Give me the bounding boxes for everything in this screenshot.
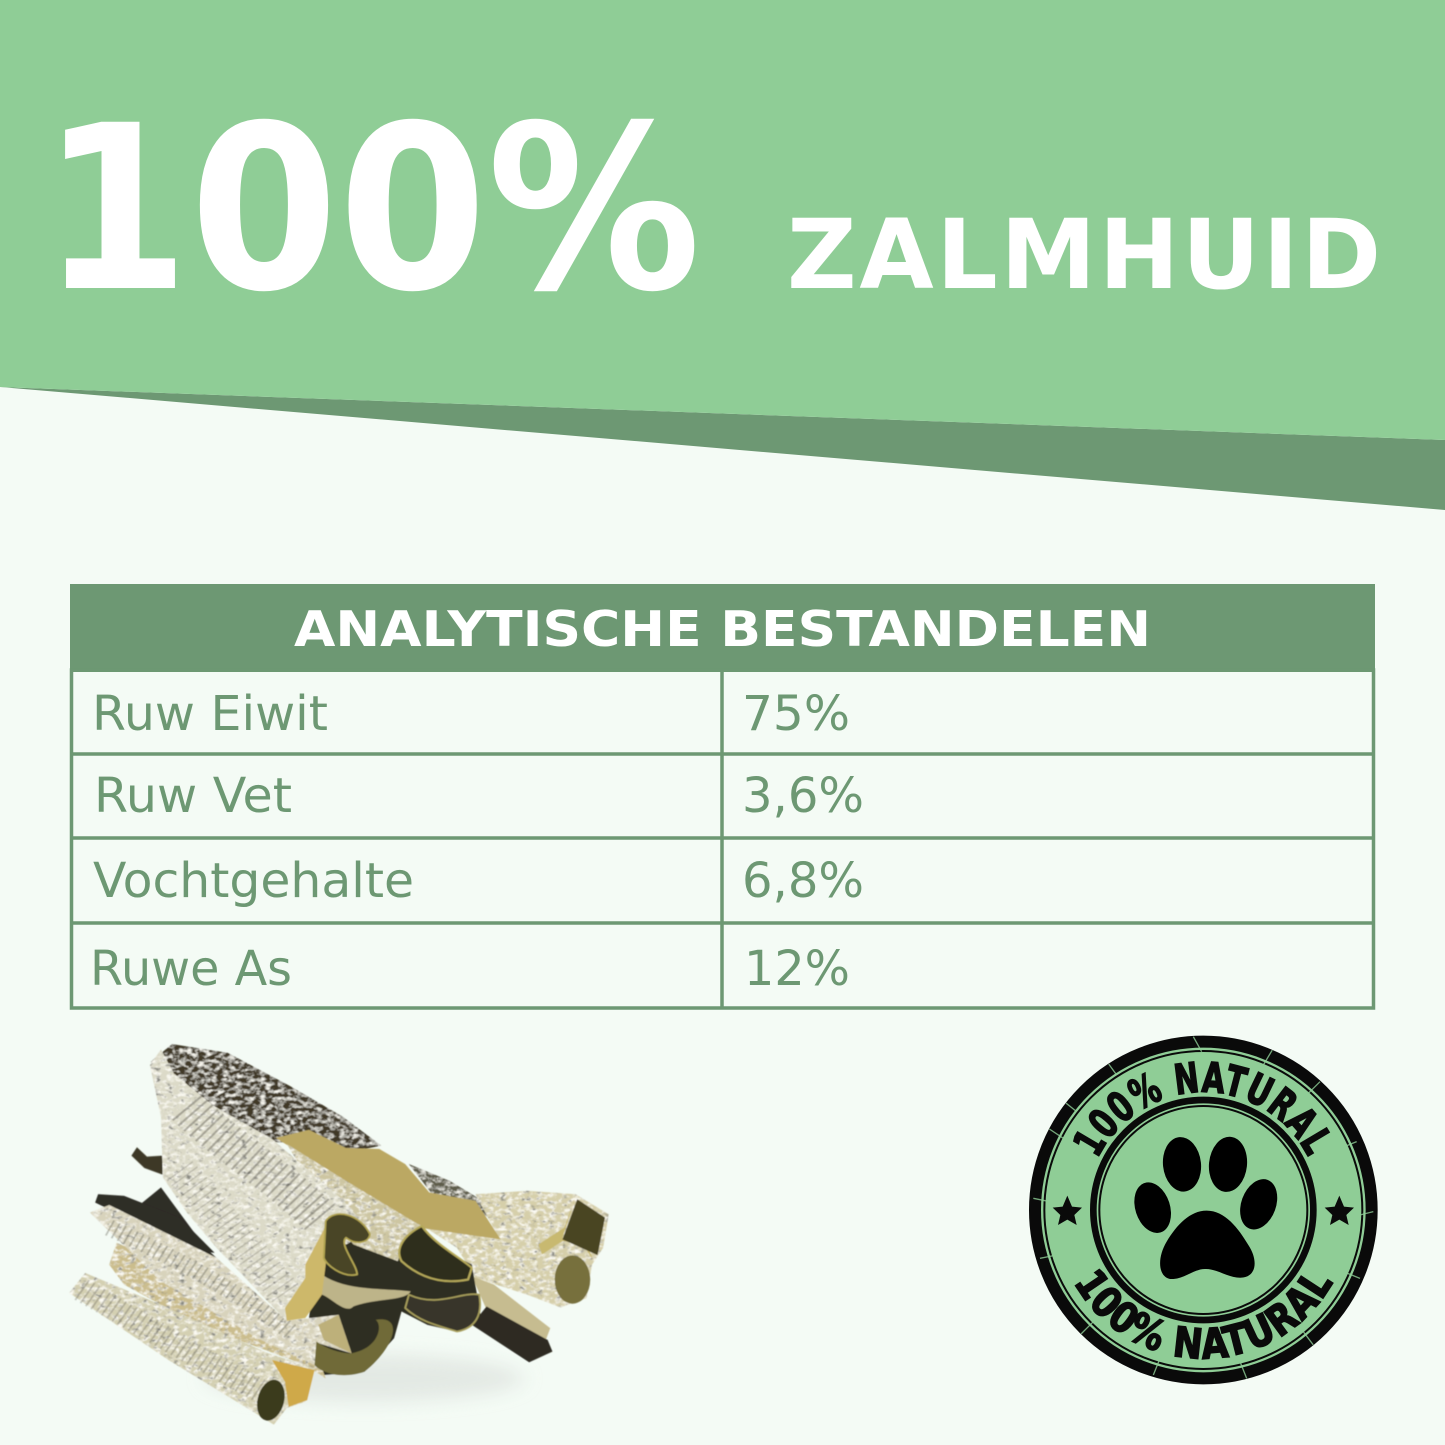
right roll yellow lip <box>538 1198 594 1261</box>
curl piece centre <box>322 1275 411 1309</box>
title: 100%: 100% <box>41 76 701 342</box>
dark middle cluster <box>309 1231 481 1375</box>
value: vochtgehalte: 6,8% <box>742 853 864 909</box>
stamp disc <box>1029 1036 1377 1384</box>
row: ruw eiwit: Ruw Eiwit <box>92 686 328 742</box>
paw toe 1 <box>1128 1178 1177 1238</box>
stamp thin inner ring <box>1099 1106 1307 1314</box>
main roll grey hatching <box>187 1107 320 1218</box>
main roll dark curl <box>324 1214 370 1275</box>
small dark scrap <box>131 1147 163 1175</box>
main roll lower hatching <box>180 1171 287 1295</box>
tan stick <box>472 1276 550 1340</box>
paw pad <box>1160 1211 1255 1279</box>
badge: 100% natural stamp <box>1029 1036 1378 1384</box>
title: zalmhuid: ZALMHUID <box>787 199 1381 311</box>
black stick lower right <box>472 1306 552 1362</box>
front roll hatching <box>81 1290 268 1395</box>
star right <box>1325 1196 1354 1225</box>
table rows <box>90 686 864 997</box>
curl piece right <box>405 1294 480 1332</box>
table heading: ANALYTISCHE BESTANDELEN <box>294 601 1151 658</box>
stamp inner ring <box>1093 1100 1313 1320</box>
ground shadow <box>205 1355 524 1402</box>
row: vochtgehalte: Vochtgehalte <box>93 853 414 909</box>
stamp outer ring <box>1035 1042 1372 1378</box>
front roll yellow interior <box>272 1360 315 1407</box>
dark stem under main roll <box>124 1187 220 1261</box>
middle roll <box>287 1144 422 1261</box>
row: ruwe as: Ruwe As <box>90 941 292 997</box>
table: analytische bestandelen <box>70 584 1375 1008</box>
front roll opening <box>253 1377 289 1423</box>
right roll <box>426 1191 609 1307</box>
main big roll <box>150 1049 370 1321</box>
star left <box>1053 1196 1082 1225</box>
stamp wear marks <box>1033 1037 1373 1378</box>
second roll hatching <box>109 1228 290 1332</box>
middle roll rim <box>399 1226 472 1281</box>
dark top inner skin <box>151 1044 381 1151</box>
right roll lower opening <box>555 1255 590 1304</box>
second roll <box>90 1205 352 1365</box>
main roll yellow interior <box>285 1226 328 1321</box>
front roll <box>69 1273 315 1425</box>
banner dark shadow wedge <box>0 387 1445 510</box>
stamp thin outer ring <box>1044 1051 1362 1369</box>
illustration: dried salmon skin rolls <box>69 1044 609 1425</box>
title <box>41 76 1381 342</box>
paw toe 4 <box>1233 1174 1284 1235</box>
black stick upper left <box>95 1194 215 1253</box>
table grid <box>71 670 1374 1008</box>
second roll tan flap <box>318 1315 352 1353</box>
right roll opening <box>562 1199 605 1255</box>
top curved text: 100% NATURAL <box>1073 1061 1330 1158</box>
banner green shape <box>0 0 1445 440</box>
header banner <box>0 0 1445 510</box>
third yellowish roll <box>109 1243 326 1378</box>
value: ruwe as: 12% <box>744 941 850 997</box>
value: ruw vet: 3,6% <box>742 768 864 824</box>
paw toe 3 <box>1206 1135 1250 1194</box>
second roll opening <box>315 1319 393 1375</box>
grey back piece <box>409 1164 490 1218</box>
value: ruw eiwit: 75% <box>742 686 850 742</box>
table header bar <box>70 584 1375 672</box>
row: ruw vet: Ruw Vet <box>94 768 292 824</box>
paw icon <box>1128 1135 1284 1279</box>
paw toe 2 <box>1160 1135 1204 1194</box>
bottom curved text: 100% NATURAL <box>1074 1268 1334 1360</box>
yellow flap <box>276 1130 501 1239</box>
